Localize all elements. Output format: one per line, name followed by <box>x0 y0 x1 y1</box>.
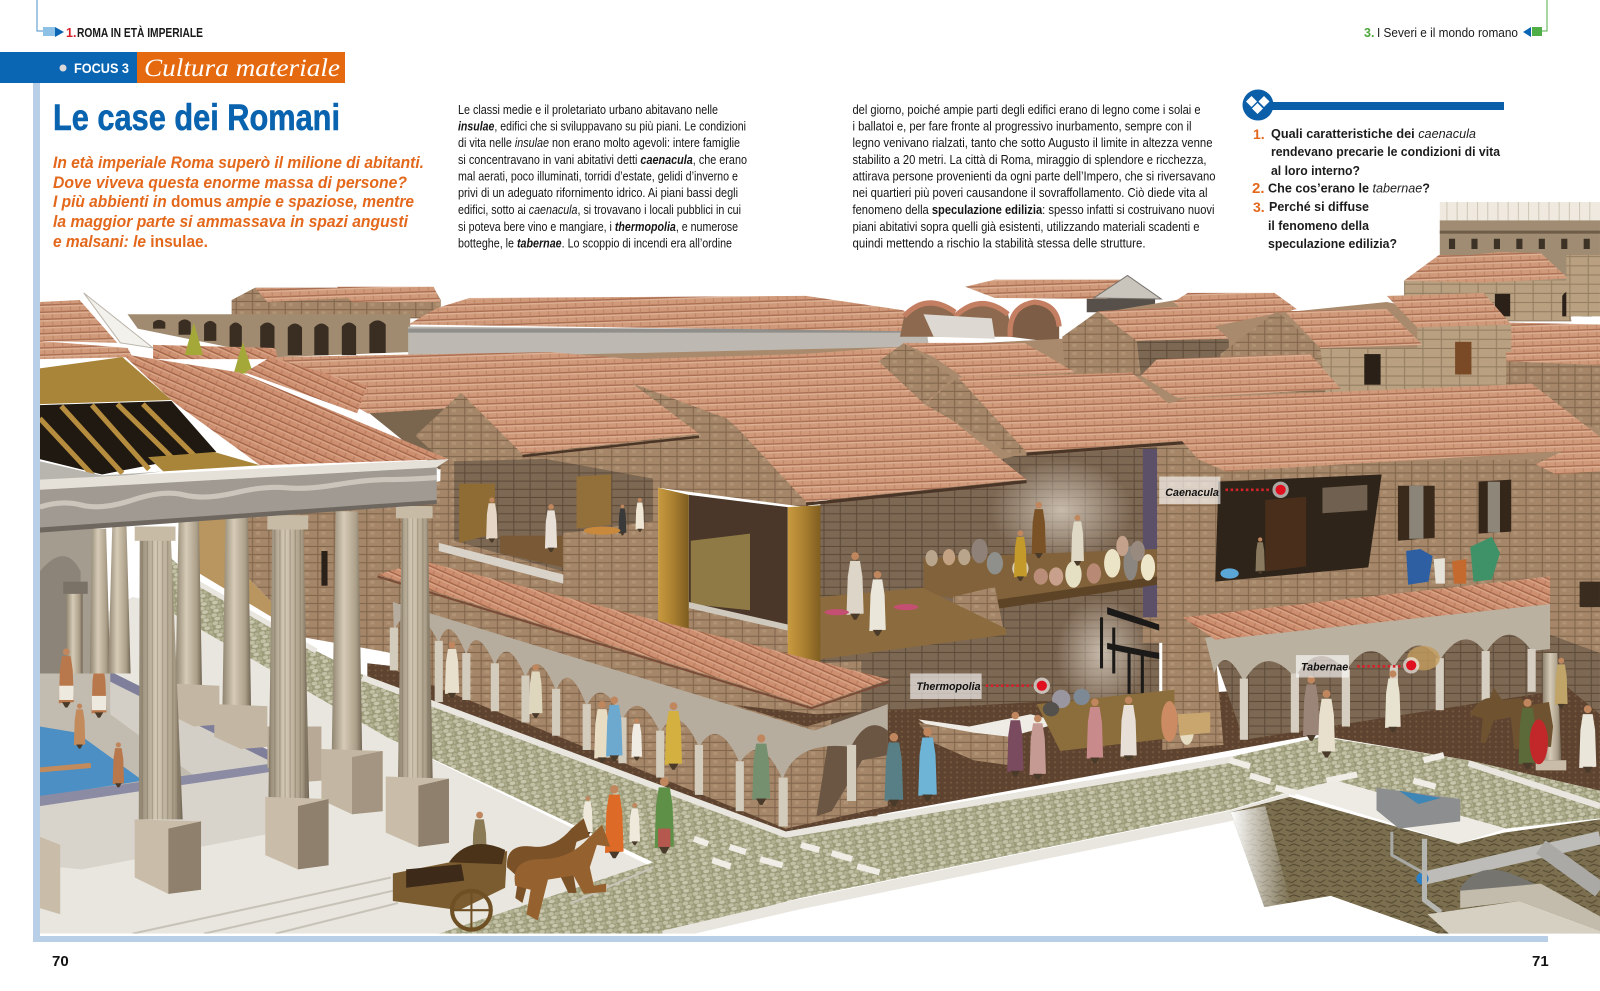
back right roofs <box>1062 293 1600 429</box>
page number 70: 70 <box>52 953 69 970</box>
long roof and grey wall <box>408 296 934 359</box>
question list: 2. <box>1252 180 1265 197</box>
roof underlay filling the gaps between buildings <box>577 300 1600 462</box>
title: Le case dei Romani <box>53 97 340 138</box>
body text column 1: si poteva bere vino e mangiare, i thermopolia, e numerose <box>458 219 738 234</box>
vaults <box>900 302 1059 343</box>
right building facade <box>1157 447 1550 617</box>
kerbs and stepping stones <box>199 584 1600 936</box>
people in the street right <box>1303 658 1596 773</box>
horses far right <box>1469 688 1553 749</box>
far right tower <box>1536 441 1600 737</box>
ground: cobbled road <box>153 551 1600 934</box>
body text column 2: legno venivano rialzati, tanto che sotto Augusto il limite in altezza venne <box>852 135 1212 150</box>
far right building <box>1404 252 1600 321</box>
background arcade <box>128 314 410 357</box>
body text column 1: si concentravano in vani abitativi detti caenacula, che erano <box>458 152 747 167</box>
body text column 1: edifici, sotto ai caenacula, si trovavano i locali pubblici in cui <box>458 202 741 217</box>
intro text: In età imperiale Roma superò il milione di abitanti. <box>53 154 424 172</box>
main roofs, middle distance <box>245 343 1341 469</box>
question list: 1. <box>1253 126 1265 142</box>
people <box>445 642 1596 858</box>
label: Tabernae <box>1296 655 1419 678</box>
central gable and posts <box>651 418 821 665</box>
running header left: ROMA IN ETÀ IMPERIALE <box>77 25 203 40</box>
question list: il fenomeno della <box>1268 218 1370 233</box>
body text column 2: stabilito a 20 metri. La città di Roma, miraggio di splendore e ricchezza, <box>852 152 1206 167</box>
focus banner: FOCUS 3 <box>74 60 129 76</box>
body text column 1: di vita nelle insulae non erano molto agevoli: intere famiglie <box>458 135 740 150</box>
question list: 3. <box>1253 199 1265 215</box>
pavement steps <box>133 867 653 934</box>
running header right: 3. <box>1364 26 1374 40</box>
intro text <box>53 154 424 251</box>
running header left: 1. <box>66 26 76 40</box>
label: Caenacula <box>1159 477 1289 504</box>
body text column 1: mal aerati, poco illuminati, torridi d’estate, gelidi d’inverno e <box>458 168 738 184</box>
column group right <box>1536 653 1566 770</box>
cypresses <box>185 322 253 373</box>
colosseum in the distance <box>1440 202 1600 286</box>
small red roof <box>153 345 278 359</box>
front arcade <box>378 561 890 829</box>
body text column 1: insulae, edifici che si sviluppavano su più piani. Le condizioni <box>458 118 746 134</box>
pool complex <box>40 524 281 869</box>
page number 71: 71 <box>1532 953 1549 970</box>
intro text: la maggior parte si ammassava in spazi angusti <box>53 213 408 231</box>
question list: Quali caratteristiche dei caenacula <box>1271 126 1476 141</box>
running header right <box>1364 0 1547 40</box>
label: Caenacula: Caenacula <box>1165 487 1219 499</box>
body text column 2 <box>852 102 1216 250</box>
ground: brown arcade floors <box>367 663 1600 832</box>
right arcade <box>1162 577 1550 750</box>
people at the thermopolium <box>885 696 1137 806</box>
temple roof left <box>40 293 449 533</box>
central room <box>820 446 1188 712</box>
front columns <box>40 506 449 914</box>
wall below the upper floors <box>439 546 878 816</box>
stone wall behind the colonnade <box>199 481 440 653</box>
running header right: I Severi e il mondo romano <box>1377 26 1518 40</box>
temple <box>965 276 1161 312</box>
intro text: I più abbienti in domus ampie e spaziose, mentre <box>53 193 414 211</box>
focus banner <box>0 52 345 83</box>
background left building <box>232 287 441 318</box>
people in the street foreground <box>583 777 674 858</box>
body text column 2: fenomeno della speculazione edilizia: spesso infatti si costruivano nuovi <box>852 202 1215 217</box>
illustration: cutaway of a Roman street with insulae <box>40 202 1600 936</box>
question list: Perché si diffuse <box>1269 199 1369 214</box>
question list: Che cos’erano le tabernae? <box>1268 180 1430 196</box>
upper left room <box>416 384 726 602</box>
body text column 2: attirava persone provenienti da ogni parte dell’Impero, che si riversavano <box>852 168 1216 184</box>
colonnade <box>40 506 449 914</box>
people in the arcade <box>445 642 770 805</box>
running header left <box>37 0 203 40</box>
body text column 2: quindi mettendo a rischio la stabilità stessa delle strutture. <box>852 236 1146 250</box>
rear columns <box>90 511 383 814</box>
body text column 2: i ballatoi e, per fare fronte al progressivo inurbamento, sempre con il <box>852 118 1192 134</box>
top roofs over the central room <box>727 372 1210 504</box>
body text column 2: del giorno, poiché ampie parti degli edifici erano di legno come i solai e <box>852 102 1200 117</box>
question list: speculazione edilizia? <box>1268 236 1397 251</box>
intro text: e malsani: le insulae. <box>53 233 208 251</box>
intro text: Dove viveva questa enorme massa di persone? <box>53 174 407 192</box>
chariot with horses <box>393 812 610 930</box>
body text column 2: piani abitativi sopra quelli già esistenti, utilizzando materiali scadenti e <box>852 219 1200 234</box>
body text column 2: nei quartieri più poveri causandone il sovraffollamento. Ciò diede vita al <box>852 185 1208 200</box>
question list <box>1252 126 1501 251</box>
body text column 1: Le classi medie e il proletariato urbano abitavano nelle <box>458 102 718 117</box>
label: Thermopolia <box>910 673 1050 699</box>
underground section with pipes <box>1231 781 1600 934</box>
ground: pavement <box>40 597 653 934</box>
thermopolium counter and table <box>918 689 1210 765</box>
body text column 1: privi di un adeguato rifornimento idrico. Ai piani bassi degli <box>458 185 738 200</box>
question list: rendevano precarie le condizioni di vita <box>1271 144 1501 159</box>
body text column 1 <box>458 102 747 250</box>
question list: al loro interno? <box>1271 163 1360 178</box>
right long roof <box>1153 384 1600 471</box>
questions panel <box>1242 90 1504 251</box>
label: Tabernae: Tabernae <box>1301 661 1348 673</box>
label: Thermopolia: Thermopolia <box>916 681 981 693</box>
focus banner: Cultura materiale <box>144 55 340 82</box>
icon: diamonds badge and rule <box>1242 90 1504 120</box>
body text column 1: botteghe, le tabernae. Lo scoppio di incendi era all’ordine <box>458 236 732 250</box>
